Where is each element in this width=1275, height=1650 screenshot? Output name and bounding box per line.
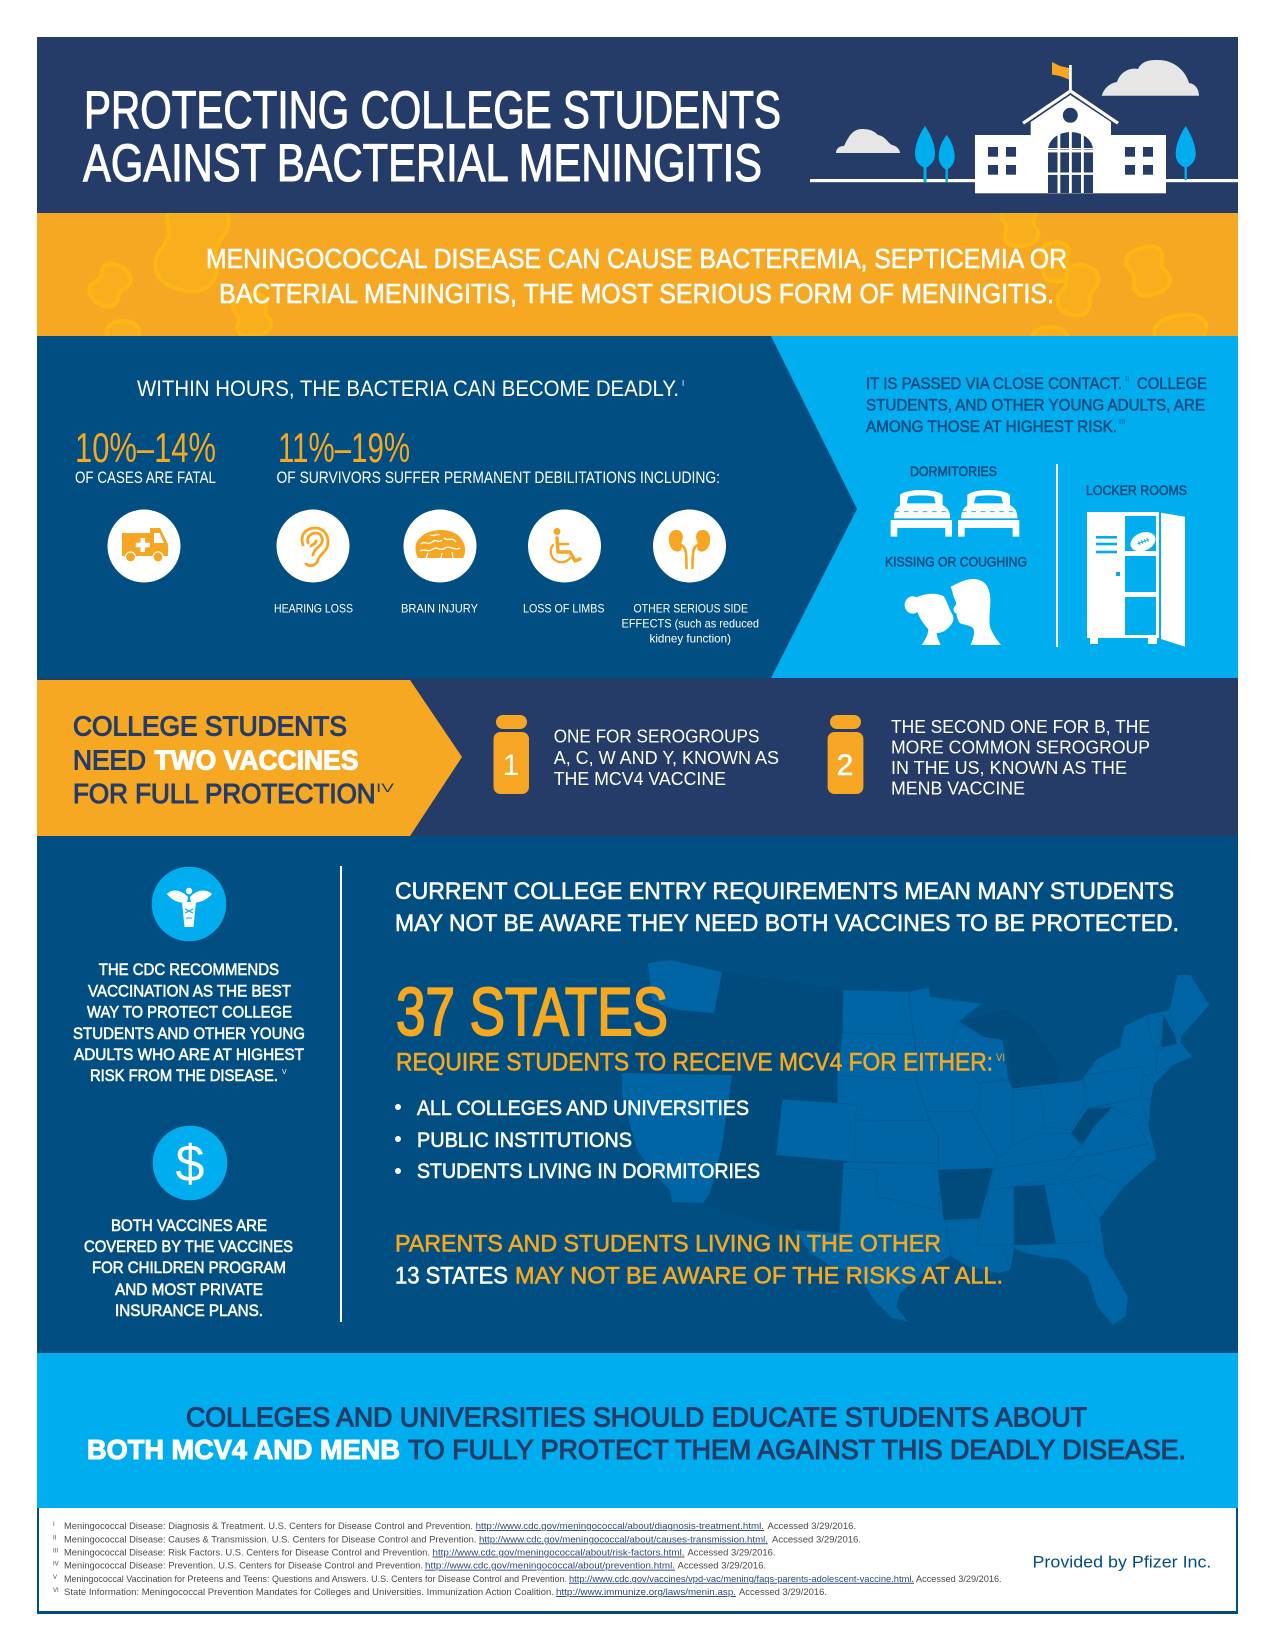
icon: dollar sign: $ — [176, 1135, 205, 1193]
icon: brain — [404, 510, 476, 582]
footnotes: State Information: Meningococcal Prevention Mandates for Colleges and Universities. Immunization Action Coalition. — [64, 1587, 554, 1598]
list: mandate types: STUDENTS LIVING IN DORMITORIES — [417, 1159, 760, 1183]
footnotes: VI — [53, 1588, 59, 1594]
panel: call to action — [37, 1353, 1238, 1508]
heading: within hours: I — [682, 379, 684, 388]
footnotes: IV — [53, 1562, 59, 1568]
panel: header — [37, 37, 1238, 213]
CDC text: VACCINATION AS THE BEST — [88, 981, 291, 1000]
panel: call to action: COLLEGES AND UNIVERSITIES SHOULD EDUCATE STUDENTS ABOUT — [186, 1402, 1087, 1432]
stat: 37 states: REQUIRE STUDENTS TO RECEIVE MCV4 FOR EITHER: — [396, 1049, 993, 1077]
icon: kidneys — [653, 510, 726, 582]
callout: other 13 states: MAY NOT BE AWARE OF THE RISKS AT ALL. — [515, 1262, 1003, 1290]
vaccine 2 text: IN THE US, KNOWN AS THE — [891, 757, 1127, 778]
transmission text: II — [1125, 374, 1129, 383]
transmission text: III — [1119, 417, 1125, 426]
transmission text: COLLEGE — [1137, 374, 1207, 393]
divider — [1056, 464, 1058, 647]
coverage text: INSURANCE PLANS. — [115, 1301, 263, 1320]
footnotes: http://www.cdc.gov/meningococcal/about/prevention.html. — [425, 1561, 675, 1572]
footnotes: Accessed 3/29/2016. — [688, 1548, 776, 1558]
icon labels: kidney function) — [650, 632, 731, 646]
icon: locker — [1087, 512, 1185, 647]
stat: survivors: 11%–19% — [278, 424, 410, 471]
heading: entry requirements — [395, 878, 1179, 937]
stat: fatal cases: OF CASES ARE FATAL — [75, 469, 216, 487]
icon: kissing silhouettes — [905, 579, 1001, 645]
CDC text — [73, 960, 305, 1085]
panel: disease definition band — [37, 213, 1238, 336]
label: kissing or coughing: KISSING OR COUGHING — [885, 554, 1027, 570]
coverage text: AND MOST PRIVATE — [115, 1280, 263, 1299]
list: mandate types — [395, 1096, 760, 1183]
panel: call to action: BOTH MCV4 AND MENB — [87, 1434, 400, 1465]
footnotes — [53, 1521, 1002, 1598]
title: PROTECTING COLLEGE STUDENTS — [84, 81, 781, 140]
CDC text: RISK FROM THE DISEASE. — [90, 1066, 278, 1085]
panel: footer — [37, 1508, 1238, 1614]
icon: vaccine vial 2: 2 — [837, 749, 853, 782]
footnotes: Accessed 3/29/2016. — [739, 1587, 827, 1598]
definition text — [206, 243, 1067, 309]
icon: vaccine vial 1: 1 — [503, 749, 519, 782]
footnotes: Meningococcal Disease: Diagnosis & Treatment. U.S. Centers for Disease Control and Prevention. — [64, 1521, 473, 1532]
coverage text: FOR CHILDREN PROGRAM — [92, 1258, 286, 1277]
footnotes: http://www.cdc.gov/meningococcal/about/causes-transmission.html. — [479, 1534, 768, 1545]
stat: survivors — [276, 424, 720, 487]
footnotes: I — [53, 1522, 55, 1528]
vaccine 1 text: A, C, W AND Y, KNOWN AS — [554, 747, 779, 768]
icon: dollar sign — [153, 1126, 227, 1200]
stat: survivors: OF SURVIVORS SUFFER PERMANENT DEBILITATIONS INCLUDING: — [276, 469, 720, 487]
CDC text: THE CDC RECOMMENDS — [99, 960, 279, 979]
coverage text — [84, 1216, 293, 1320]
stat: 37 states — [396, 974, 1005, 1077]
CDC text: STUDENTS AND OTHER YOUNG — [73, 1024, 305, 1043]
footnotes: Accessed 3/29/2016. — [678, 1561, 766, 1572]
footnotes: Meningococcal Disease: Risk Factors. U.S. Centers for Disease Control and Prevention. — [64, 1548, 430, 1558]
list: mandate types: PUBLIC INSTITUTIONS — [417, 1128, 632, 1152]
footnotes: V — [53, 1575, 57, 1581]
label: locker rooms: LOCKER ROOMS — [1086, 482, 1187, 498]
list: mandate types: ALL COLLEGES AND UNIVERSITIES — [417, 1096, 749, 1120]
arrow callout: two vaccines: NEED — [73, 744, 146, 776]
arrow callout: two vaccines — [37, 680, 462, 836]
transmission text — [866, 374, 1207, 436]
icon: vaccine vial 1 — [494, 715, 529, 794]
panel: vaccines row — [37, 678, 1238, 836]
panel: call to action: TO FULLY PROTECT THEM AGAINST THIS DEADLY DISEASE. — [408, 1434, 1186, 1465]
vaccine 2 text: MORE COMMON SEROGROUP — [891, 736, 1150, 758]
transmission text: STUDENTS, AND OTHER YOUNG ADULTS, ARE — [866, 396, 1205, 414]
footnotes: III — [53, 1548, 58, 1554]
CDC text: WAY TO PROTECT COLLEGE — [87, 1002, 292, 1022]
stat: 37 states: 37 STATES — [396, 974, 668, 1050]
footnotes: Accessed 3/29/2016. — [916, 1574, 1002, 1585]
vaccine 1 text: THE MCV4 VACCINE — [554, 768, 726, 789]
footnotes: Meningococcal Vaccination for Preteens and Teens: Questions and Answers. U.S. Centers for Disease Control and Prevention. — [64, 1574, 567, 1585]
icon labels: EFFECTS (such as reduced — [622, 616, 759, 630]
heading: within hours: WITHIN HOURS, THE BACTERIA CAN BECOME DEADLY. — [137, 376, 679, 401]
icon: ambulance — [108, 510, 180, 582]
coverage text: BOTH VACCINES ARE — [111, 1216, 267, 1235]
footnotes: http://www.cdc.gov/vaccines/vpd-vac/mening/faqs-parents-adolescent-vaccine.html. — [569, 1574, 914, 1585]
footnotes: Accessed 3/29/2016. — [768, 1521, 856, 1532]
panel: transmission — [771, 336, 1238, 678]
CDC text: V — [282, 1069, 287, 1076]
heading: entry requirements: MAY NOT BE AWARE THEY NEED BOTH VACCINES TO BE PROTECTED. — [395, 910, 1179, 937]
footnotes: II — [53, 1535, 57, 1541]
arrow callout: two vaccines: IV — [376, 781, 394, 795]
callout: other 13 states — [395, 1230, 1003, 1290]
coverage text: COVERED BY THE VACCINES — [84, 1237, 293, 1256]
icon: wheelchair — [528, 510, 601, 582]
vaccine 2 text — [891, 716, 1150, 798]
definition text: MENINGOCOCCAL DISEASE CAN CAUSE BACTEREMIA, SEPTICEMIA OR — [206, 243, 1067, 274]
label: dormitories: DORMITORIES — [910, 463, 997, 479]
footnotes: Meningococcal Disease: Causes & Transmission. U.S. Centers for Disease Control and Prevention. — [64, 1534, 476, 1545]
vaccine 1 text — [554, 726, 779, 789]
transmission text: AMONG THOSE AT HIGHEST RISK. — [866, 417, 1117, 436]
footnotes: http://www.cdc.gov/meningococcal/about/risk-factors.html. — [432, 1548, 684, 1558]
icon: caduceus — [152, 867, 226, 941]
icon: ear — [276, 510, 350, 582]
callout: other 13 states: 13 STATES — [395, 1262, 508, 1290]
footnotes: http://www.immunize.org/laws/menin.asp. — [556, 1587, 736, 1598]
icon labels: HEARING LOSS — [274, 602, 353, 616]
arrow callout: two vaccines: FOR FULL PROTECTION — [73, 778, 376, 809]
callout: other 13 states: PARENTS AND STUDENTS LIVING IN THE OTHER — [395, 1230, 941, 1258]
stat: fatal cases: 10%–14% — [75, 424, 216, 471]
icon: beds — [891, 490, 1019, 537]
icon labels: LOSS OF LIMBS — [523, 602, 604, 616]
transmission text: IT IS PASSED VIA CLOSE CONTACT. — [866, 374, 1122, 393]
arrow callout: two vaccines: TWO VACCINES — [154, 744, 358, 776]
CDC text: ADULTS WHO ARE AT HIGHEST — [74, 1045, 304, 1064]
icon labels — [274, 602, 759, 646]
icon: vaccine vial 2 — [828, 715, 863, 794]
definition text: BACTERIAL MENINGITIS, THE MOST SERIOUS FORM OF MENINGITIS. — [219, 278, 1054, 309]
panel: consequences — [37, 336, 1238, 678]
footnotes: Accessed 3/29/2016. — [772, 1534, 861, 1545]
divider — [340, 866, 342, 1322]
title — [83, 81, 781, 193]
panel: requirements — [37, 836, 1238, 1353]
title: AGAINST BACTERIAL MENINGITIS — [83, 134, 762, 193]
arrow callout: two vaccines: COLLEGE STUDENTS — [73, 711, 347, 742]
footnotes: http://www.cdc.gov/meningococcal/about/diagnosis-treatment.html. — [476, 1521, 764, 1532]
heading: entry requirements: CURRENT COLLEGE ENTRY REQUIREMENTS MEAN MANY STUDENTS — [395, 878, 1174, 905]
footnotes: Meningococcal Disease: Prevention. U.S. Centers for Disease Control and Prevention. — [64, 1561, 423, 1572]
decorative bacteria — [85, 189, 1214, 379]
stat: fatal cases — [75, 424, 216, 487]
icon labels: BRAIN INJURY — [401, 602, 478, 616]
stat: 37 states: VI — [996, 1052, 1005, 1064]
vaccine 2 text: MENB VACCINE — [891, 778, 1025, 798]
map: united states — [622, 960, 1209, 1325]
vaccine 1 text: ONE FOR SEROGROUPS — [554, 726, 759, 747]
vaccine 2 text: THE SECOND ONE FOR B, THE — [891, 716, 1150, 737]
icon: college building with clouds and trees — [810, 60, 1238, 193]
sponsor: Provided by Pfizer Inc. — [1032, 1553, 1211, 1572]
icon labels: OTHER SERIOUS SIDE — [634, 602, 748, 616]
